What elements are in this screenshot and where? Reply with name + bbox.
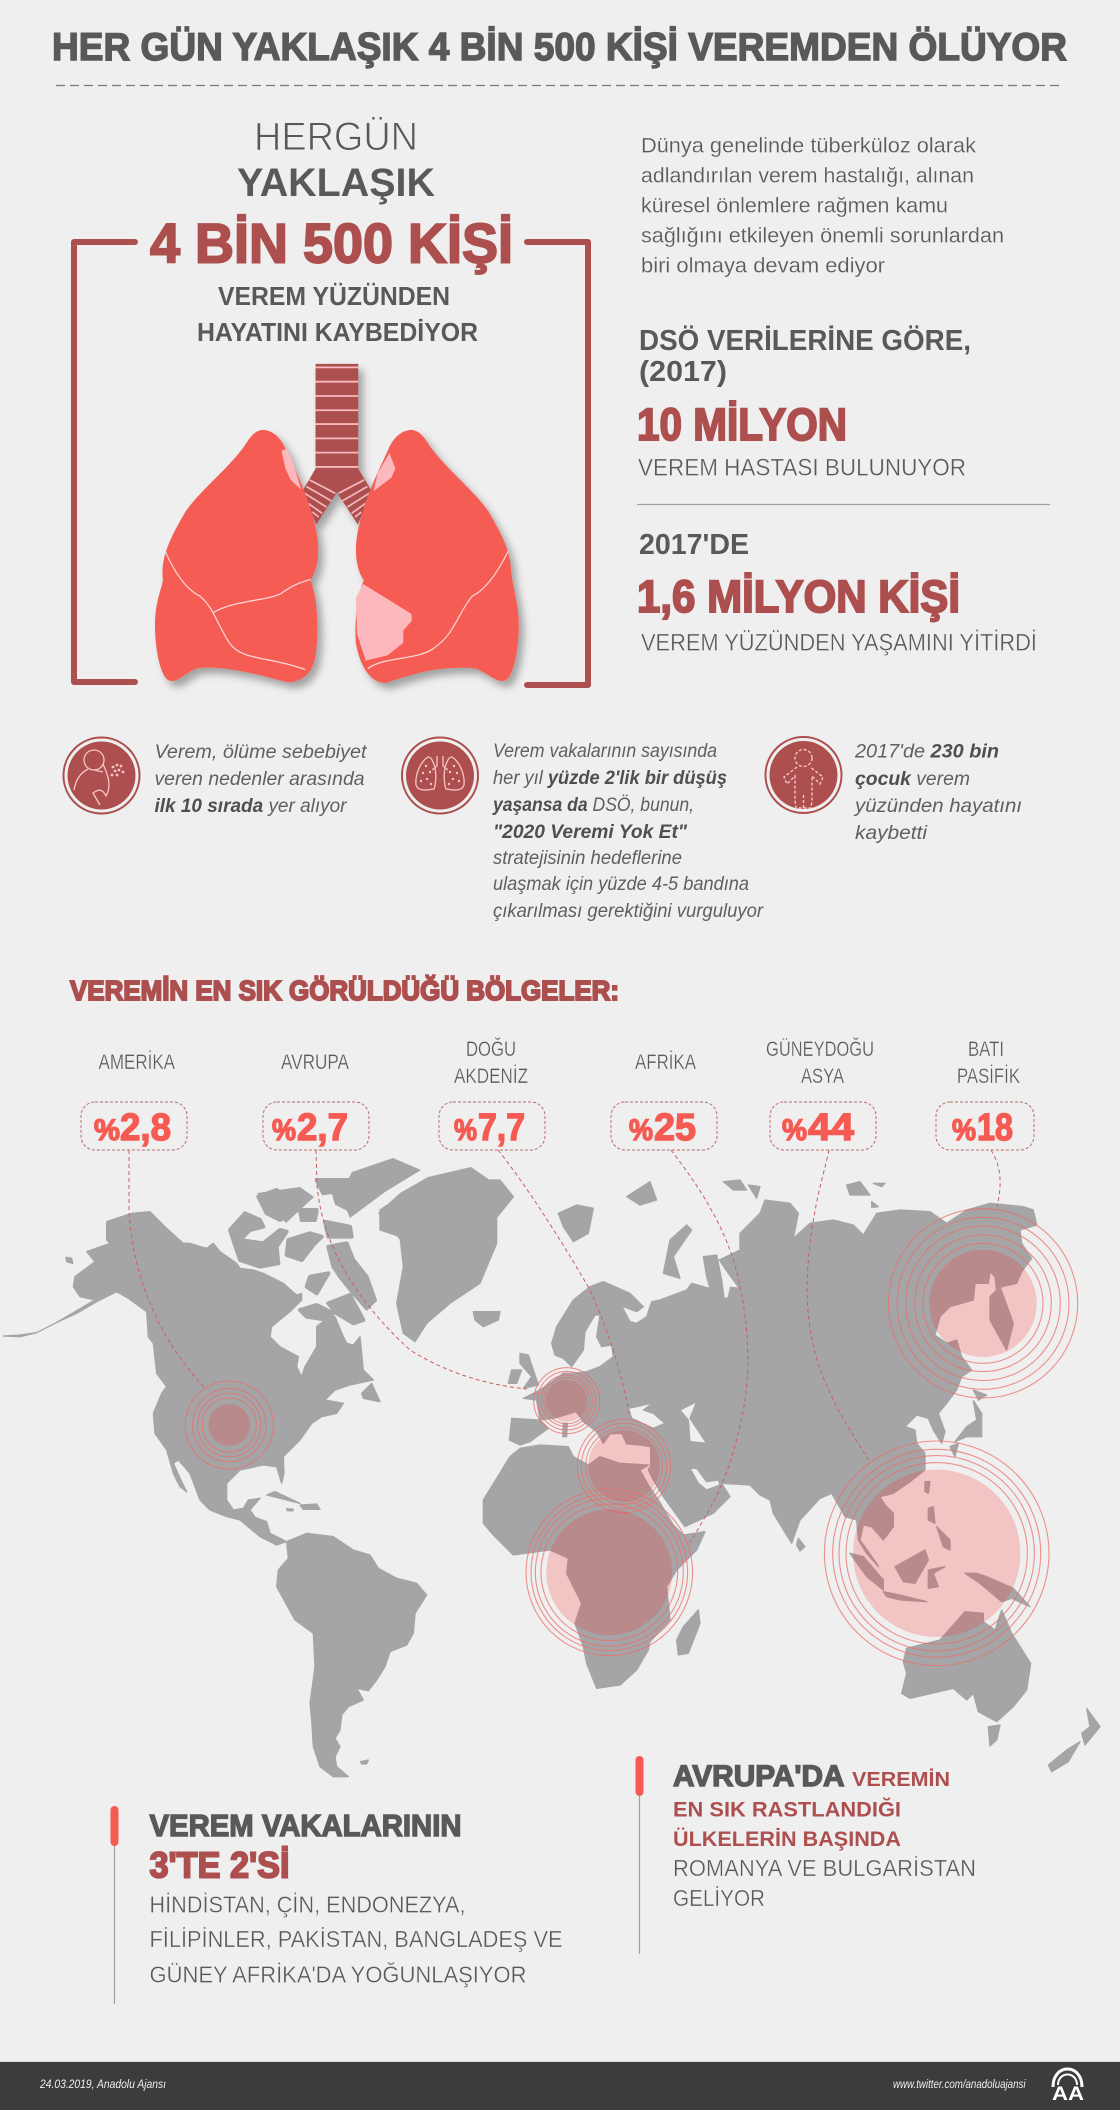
callout: Europe: AVRUPA'DA	[673, 1760, 844, 1793]
region: Amerika: %	[94, 1114, 120, 1147]
region: Batı Pasifik	[936, 1038, 1034, 1150]
headline number: 4 BİN 500 KİŞİ	[150, 212, 513, 274]
region: Batı Pasifik: %	[952, 1114, 976, 1147]
text block: children deaths: kaybetti	[855, 823, 928, 844]
panel: statistic 1,6 milyon	[637, 529, 1037, 656]
text block: 2020 strategy: stratejisinin hedeflerine	[493, 848, 682, 869]
icon: small lungs	[402, 738, 478, 814]
text block: introduction: biri olmaya devam ediyor	[641, 254, 885, 278]
panel: main statistic with lungs	[74, 115, 588, 685]
map: australia and new zealand	[797, 1538, 1100, 1772]
icon: lungs	[155, 364, 519, 683]
text block: top ten causes: ilk 10 sırada yer alıyor	[154, 796, 347, 817]
region: Güneydoğu Asya: %	[782, 1114, 807, 1147]
icon: coughing person	[64, 738, 140, 814]
text block: introduction: Dünya genelinde tüberküloz olarak	[641, 134, 977, 158]
region: Güneydoğu Asya	[766, 1038, 876, 1150]
text block: 2020 strategy: çıkarılması gerektiğini vurguluyor	[493, 901, 764, 922]
hotspot: Amerika	[185, 1381, 273, 1469]
callout: Europe: ÜLKELERİN BAŞINDA	[673, 1828, 901, 1851]
text block: children deaths	[853, 742, 1022, 844]
region: Amerika: 2,8	[120, 1107, 171, 1149]
panel: statistic 10 milyon: VEREM HASTASI BULUNUYOR	[638, 454, 966, 482]
panel: statistic 10 milyon	[637, 324, 971, 482]
icon: child	[766, 737, 842, 813]
heading: hergün yaklaşık: YAKLAŞIK	[237, 161, 435, 205]
region: Batı Pasifik: PASİFİK	[957, 1065, 1020, 1088]
heading: hergün yaklaşık: HERGÜN	[254, 115, 418, 159]
region: Afrika: %	[629, 1114, 653, 1147]
hotspot: Doğu Akdeniz	[577, 1419, 671, 1513]
text block: introduction	[641, 134, 1004, 278]
panel: statistic 1,6 milyon: 2017'DE	[639, 529, 749, 561]
region: Amerika	[81, 1051, 187, 1150]
text block: top ten causes: veren nedenler arasında	[154, 769, 364, 790]
callout: Europe: ROMANYA VE BULGARİSTAN	[673, 1855, 976, 1881]
text block: 2020 strategy	[492, 741, 764, 922]
region: Avrupa: 2,7	[297, 1107, 348, 1149]
region: Avrupa	[263, 1051, 369, 1150]
text block: 2020 strategy: yaşansa da DSÖ, bunun,	[492, 795, 694, 816]
region: Doğu Akdeniz: %	[454, 1114, 477, 1147]
footer: www.twitter.com/anadoluajansi	[893, 2079, 1026, 2091]
text block: 2020 strategy: ulaşmak için yüzde 4-5 bandına	[493, 874, 749, 895]
region: Afrika: AFRİKA	[635, 1051, 696, 1074]
callout: Europe: VEREMİN	[852, 1768, 950, 1791]
panel: statistic 1,6 milyon: VEREM YÜZÜNDEN YAŞAMINI YİTİRDİ	[641, 630, 1037, 656]
callout: Europe	[636, 1756, 976, 1954]
footer: 24.03.2019, Anadolu Ajansı	[39, 2079, 166, 2091]
text block: children deaths: 2017'de 230 bin	[854, 742, 999, 762]
icon: agency logo	[1052, 2069, 1084, 2105]
panel: statistic 1,6 milyon: 1,6 MİLYON KİŞİ	[637, 571, 960, 622]
region: Güneydoğu Asya: ASYA	[801, 1065, 844, 1088]
heading: hergün yaklaşık	[237, 115, 435, 205]
dashed leader lines	[129, 1150, 1000, 1543]
hotspot: Afrika	[526, 1489, 693, 1656]
callout: Europe: GELİYOR	[673, 1885, 765, 1911]
callout: two thirds of cases: HİNDİSTAN, ÇİN, ENDONEZYA,	[150, 1892, 466, 1918]
panel: statistic 10 milyon: 10 MİLYON	[637, 399, 847, 450]
panel: statistic 10 milyon: (2017)	[639, 356, 727, 388]
text block: introduction: küresel önlemlere rağmen kamu	[641, 194, 948, 218]
map: south america and caribbean	[267, 1492, 427, 1777]
region: Doğu Akdeniz: DOĞU	[466, 1038, 516, 1061]
callout: two thirds of cases: FİLİPİNLER, PAKİSTAN, BANGLADEŞ VE	[150, 1926, 562, 1952]
panel: statistic 10 milyon: DSÖ VERİLERİNE GÖRE,	[639, 324, 971, 357]
callout: two thirds of cases: GÜNEY AFRİKA'DA YOĞUNLAŞIYOR	[150, 1962, 526, 1988]
region: Doğu Akdeniz	[439, 1038, 545, 1150]
region: Batı Pasifik: BATI	[968, 1038, 1004, 1061]
region: Amerika: AMERİKA	[98, 1051, 175, 1074]
text block: introduction: adlandırılan verem hastalığı, alınan	[641, 164, 974, 188]
region: Güneydoğu Asya: GÜNEYDOĞU	[766, 1038, 874, 1061]
callout: two thirds of cases: 3'TE 2'Sİ	[150, 1844, 290, 1886]
bracket frame	[74, 242, 588, 685]
subheading: VEREM YÜZÜNDEN	[218, 281, 450, 311]
map: east asia islands	[850, 1287, 1030, 1607]
hotspot: Batı Pasifik	[888, 1209, 1078, 1398]
text block: 2020 strategy: "2020 Veremi Yok Et"	[493, 822, 688, 843]
region: Avrupa: AVRUPA	[281, 1051, 349, 1074]
callout: Europe: EN SIK RASTLANDIĞI	[673, 1798, 901, 1822]
text block: children deaths: yüzünden hayatını	[853, 796, 1022, 817]
text block: top ten causes: Verem, ölüme sebebiyet	[154, 742, 367, 763]
region: Güneydoğu Asya: 44	[808, 1107, 854, 1149]
text block: 2020 strategy: Verem vakalarının sayısında	[493, 741, 717, 762]
hotspot: Avrupa	[534, 1368, 600, 1434]
heading: regions: VEREMİN EN SIK GÖRÜLDÜĞÜ BÖLGELER:	[70, 975, 619, 1006]
footer	[0, 2061, 1120, 2110]
region: Afrika: 25	[654, 1107, 696, 1149]
icon: agency logo: AA	[1052, 2084, 1084, 2105]
text block: children deaths: çocuk verem	[855, 769, 970, 790]
callout: two thirds of cases	[110, 1806, 562, 2004]
map: north america and greenland	[3, 1180, 513, 1545]
title: HER GÜN YAKLAŞIK 4 BİN 500 KİŞİ VEREMDEN ÖLÜYOR	[52, 26, 1067, 69]
callout: two thirds of cases: VEREM VAKALARININ	[150, 1808, 462, 1843]
subheading	[197, 281, 478, 347]
text block: 2020 strategy: her yıl yüzde 2'lik bir düşüş	[493, 768, 727, 789]
region: Batı Pasifik: 18	[977, 1107, 1013, 1149]
region: Afrika	[611, 1051, 717, 1150]
text block: top ten causes	[154, 742, 367, 817]
text block: introduction: sağlığını etkileyen önemli sorunlardan	[641, 224, 1004, 248]
map: eurasia and africa	[473, 1180, 1037, 1688]
region: Doğu Akdeniz: AKDENİZ	[454, 1065, 528, 1088]
region: Doğu Akdeniz: 7,7	[478, 1107, 525, 1149]
region: Avrupa: %	[272, 1114, 296, 1147]
subheading: HAYATINI KAYBEDİYOR	[197, 317, 478, 347]
map: far north arctic shapes	[257, 1158, 514, 1240]
hotspot: Güneydoğu Asya	[824, 1441, 1049, 1666]
world map	[3, 1158, 1100, 1777]
